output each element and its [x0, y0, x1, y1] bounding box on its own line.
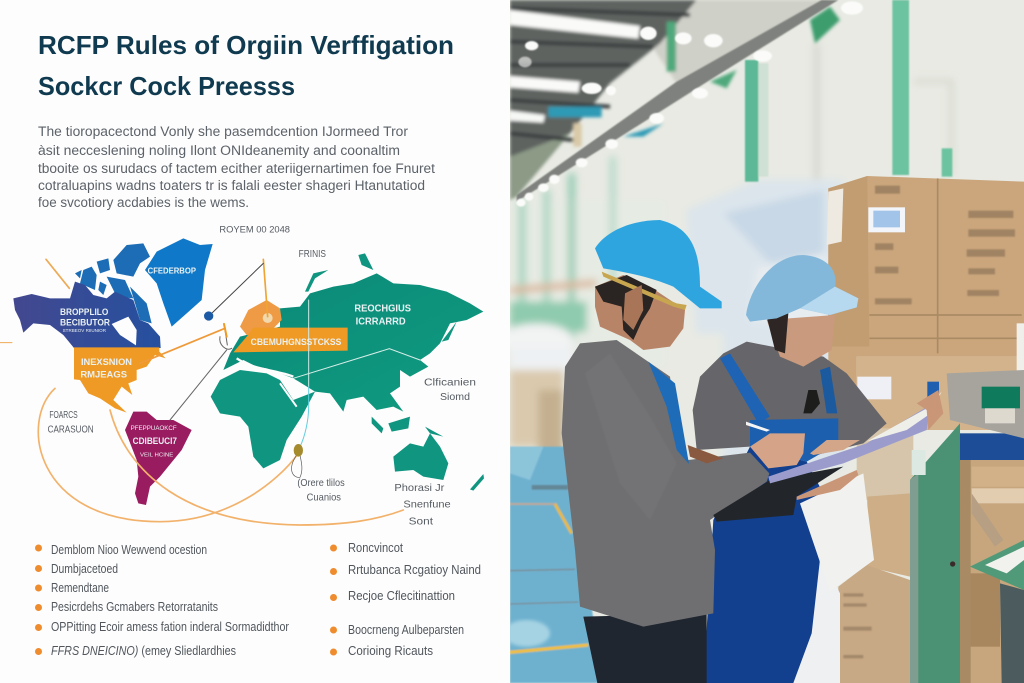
- Mediterranean gaps: [237, 358, 293, 377]
- map labels: STRBEOV RIIUNIOR: [63, 328, 106, 334]
- overhead beam: [517, 0, 838, 202]
- bullet list: right column: Roncvincot: [348, 541, 403, 555]
- bullet list: right column: Recjoe Cflecitinattion: [348, 589, 455, 603]
- label band: Europe: [233, 328, 348, 352]
- map labels: VEIL HCINE: [140, 452, 174, 458]
- world map diagram: Snenfune: [403, 500, 451, 511]
- world map diagram: (Orere tlilos: [297, 478, 345, 489]
- left panel background: [0, 0, 510, 683]
- bullet list: left column: Dumbjacetoed: [51, 562, 118, 576]
- bullet list: left column: FFRS DNEICINO) (emey Sliedlardhies: [51, 644, 236, 658]
- factory wall: [510, 0, 1024, 683]
- machine: [910, 370, 1024, 683]
- blurred factory wall, columns and pallet: [500, 43, 953, 467]
- ceiling: [510, 0, 840, 200]
- map labels: CFEDERBOP: [148, 266, 196, 276]
- map labels: PFEPPUAOKCF: [131, 426, 177, 432]
- title: RCFP Rules of Orgiin Verffigation: [38, 30, 454, 60]
- intro paragraph: tbooite os surudacs of tactem ecither ateriigernartimen foe Fnuret: [38, 161, 435, 176]
- bullet list: left column: Pesicrdehs Gcmabers Retorratanits: [51, 600, 218, 614]
- title: [38, 30, 454, 101]
- map labels: ICRRARRD: [356, 317, 406, 328]
- worker: man in sweater: [562, 220, 769, 683]
- map labels: BECIBUTOR: [60, 318, 110, 328]
- world map diagram: FRINIS: [299, 249, 326, 260]
- bullet list: right column: [330, 541, 481, 658]
- ceiling lights: [516, 1, 863, 207]
- intro paragraph: [38, 124, 435, 210]
- map labels: RMJEAGS: [80, 370, 127, 380]
- lower boxes and shelves behind machine: [838, 428, 1024, 683]
- world map diagram: Sont: [409, 516, 433, 527]
- region: Greenland: [145, 238, 213, 327]
- region: Eurasia: [223, 273, 483, 412]
- hanging document: [800, 473, 874, 592]
- worker: woman in apron: [693, 255, 887, 683]
- arctic islands: [75, 243, 152, 323]
- world map diagram: Cuanios: [307, 493, 341, 504]
- map labels: [60, 266, 412, 458]
- stacked crates at left: [510, 370, 563, 447]
- world map diagram: Clficanien: [424, 377, 476, 388]
- cardboard boxes: [827, 176, 1024, 430]
- bullet list: left column: OPPitting Ecoir amess fation inderal Sormadidthor: [51, 620, 289, 634]
- bullet list: right column: Rrtubanca Rcgatioy Naind: [348, 563, 481, 577]
- intro paragraph: The tioropacectond Vonly she pasemdcention IJormeed Tror: [38, 124, 409, 139]
- region: South America: [125, 412, 192, 505]
- man's cap: [595, 220, 722, 308]
- woman's cap: [746, 255, 858, 322]
- intro paragraph: foe svcotiory acdabies is the wems.: [38, 195, 249, 210]
- green columns: [745, 0, 952, 182]
- region: Europe: [240, 300, 282, 335]
- factory floor: [510, 446, 598, 683]
- region: Australia and islands: [305, 253, 484, 491]
- world map diagram: Siomd: [440, 392, 470, 403]
- map labels: BROPPLILO: [60, 307, 108, 317]
- world map diagram: FOARCS: [49, 410, 78, 421]
- world map diagram: Phorasi Jr: [394, 483, 445, 494]
- region: Africa: [211, 370, 315, 468]
- map labels: REOCHGIUS: [354, 303, 412, 314]
- map labels: CDIBEUCI7: [133, 436, 177, 446]
- world map diagram: [0, 225, 484, 527]
- wrapped pallet: [687, 180, 843, 467]
- bullet list: left column: Remendtane: [51, 581, 109, 595]
- connector lines: [0, 259, 420, 525]
- man's head: [595, 275, 685, 350]
- bullet list: right column: Boocrneng Aulbeparsten: [348, 623, 464, 637]
- map labels: CBEMUHGNSSTCKSS: [251, 337, 341, 347]
- title: Sockcr Cock Preesss: [38, 71, 295, 101]
- region: North America: [13, 282, 161, 348]
- green tray: [970, 540, 1024, 590]
- bullet list: left column: [35, 543, 289, 658]
- intro paragraph: àsit necceslening noling Ilont ONIdeanemity and coonaltim: [38, 143, 400, 158]
- region: Central America: [74, 347, 166, 413]
- bullet list: left column: Demblom Nioo Wewvend ocestion: [51, 543, 207, 557]
- photo: factory inspection: [500, 0, 1024, 683]
- world map diagram: CARASUON: [48, 425, 94, 436]
- clipboard and hands: [713, 390, 943, 522]
- map date label: ROYEM 00 2048: [219, 225, 290, 235]
- map pins: [204, 311, 213, 321]
- intro paragraph: cotraluapins wadns toaters tr is falali eester shageri Htanutatiod: [38, 178, 425, 193]
- bullet list: right column: Corioing Ricauts: [348, 644, 433, 658]
- map labels: INEXSNION: [81, 357, 132, 367]
